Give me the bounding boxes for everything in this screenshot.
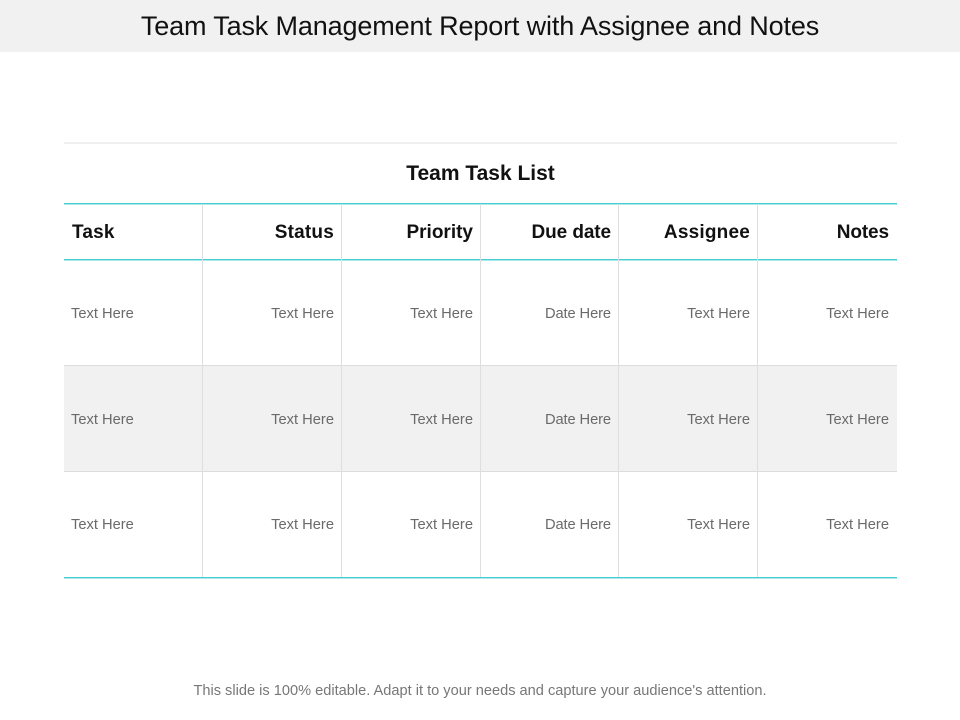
column headers: Assignee <box>664 222 750 243</box>
row 2: Text Here <box>71 412 134 428</box>
row 2: Text Here <box>410 412 473 428</box>
column headers: Task <box>72 222 115 243</box>
column headers: Priority <box>406 222 473 243</box>
row 3: Text Here <box>826 517 889 533</box>
column headers: Notes <box>837 222 889 243</box>
panel: task table <box>64 142 897 578</box>
title: Team Task Management Report with Assignee and Notes <box>141 11 819 41</box>
row 1: Text Here <box>410 306 473 322</box>
row 3: Date Here <box>545 517 611 533</box>
row 3: Text Here <box>71 517 134 533</box>
row 1: Text Here <box>687 306 750 322</box>
row 1: Text Here <box>71 306 134 322</box>
row 2: Text Here <box>271 412 334 428</box>
striped row <box>64 366 897 472</box>
row 3 <box>71 517 889 533</box>
row 3: Text Here <box>687 517 750 533</box>
row 2: Text Here <box>826 412 889 428</box>
row 3: Text Here <box>410 517 473 533</box>
table heading: Team Task List <box>406 162 555 185</box>
row 1 <box>71 306 889 322</box>
row 2: Text Here <box>687 412 750 428</box>
row 2: Date Here <box>545 412 611 428</box>
row 1: Text Here <box>826 306 889 322</box>
footer note: This slide is 100% editable. Adapt it to your needs and capture your audience's attention. <box>193 683 767 699</box>
row 1: Text Here <box>271 306 334 322</box>
row 1: Date Here <box>545 306 611 322</box>
column headers: Status <box>275 222 334 243</box>
row 2 <box>71 412 889 428</box>
title banner <box>0 0 960 52</box>
column headers: Due date <box>532 222 611 243</box>
column headers <box>72 222 889 243</box>
row 3: Text Here <box>271 517 334 533</box>
